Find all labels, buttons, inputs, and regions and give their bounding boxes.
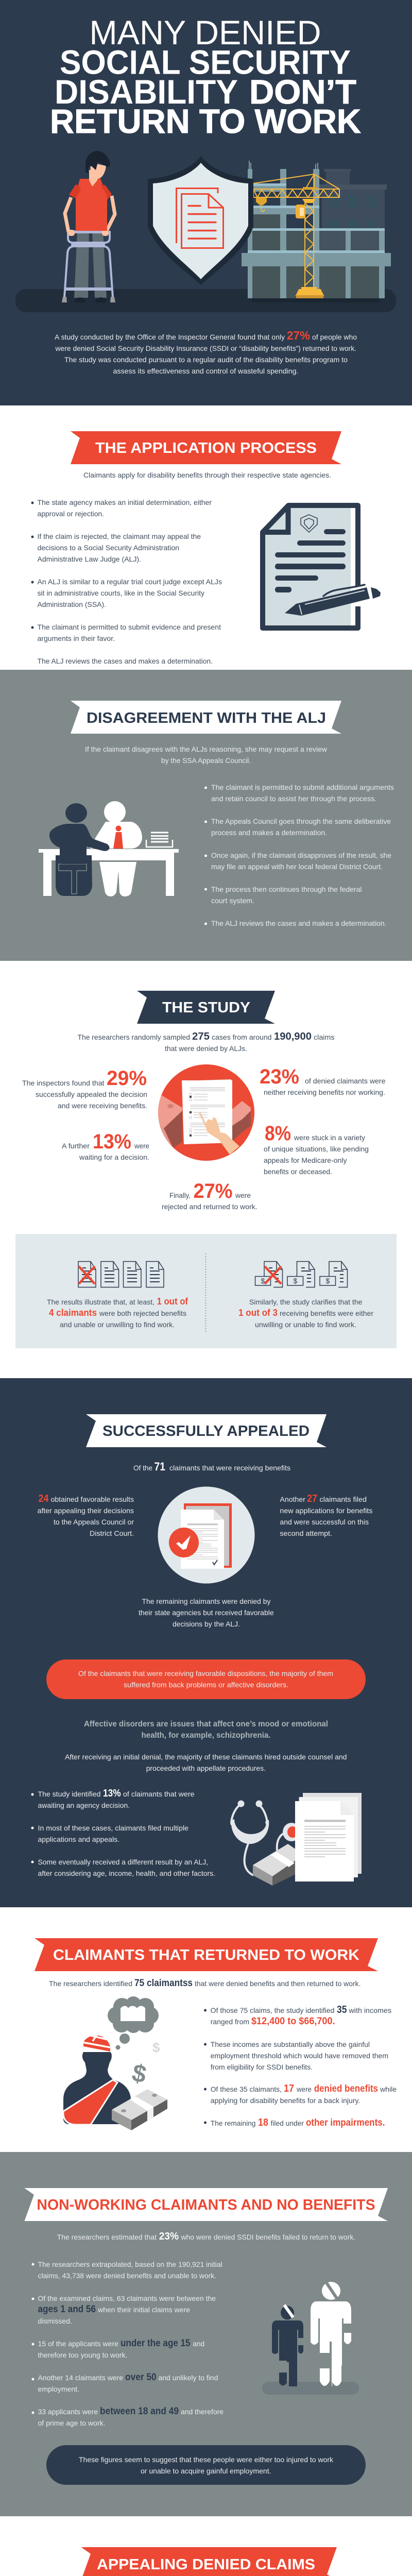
text: outside counsel: After receiving an initial denial, the majority of these claimants hired outside counsel and xyxy=(65,1753,347,1761)
dark figure xyxy=(272,2305,303,2386)
text: affective disorders definition: Affective disorders are issues that affect one’s mood or emotional xyxy=(84,1720,328,1728)
returned list: 18 xyxy=(258,2117,268,2128)
shield with document icon xyxy=(148,156,253,285)
tower crane xyxy=(253,174,339,298)
stat: 8%: appeals for Medicare-only xyxy=(264,1156,347,1164)
title xyxy=(50,13,361,140)
stat: 23%: 23% xyxy=(260,1065,299,1088)
text: 27 new applications: claimants filed xyxy=(319,1495,367,1503)
application list: The state agency makes an initial determination, either xyxy=(37,498,212,506)
study intro: that were denied by ALJs. xyxy=(165,1044,247,1053)
illustration: stethoscope, money and papers xyxy=(231,1793,362,1886)
text: 24 appeals: after appealing their decisions xyxy=(37,1506,134,1515)
intro paragraph: were denied Social Security Disability Insurance (SSDI or “disability benefits”) returned to work. xyxy=(55,344,356,352)
section background: successfully appealed xyxy=(0,1378,412,1907)
intro paragraph: of people who xyxy=(312,333,357,341)
application list: arguments in their favor. xyxy=(37,634,115,642)
section background: non-working xyxy=(0,2152,412,2516)
appealed list: In most of these cases, claimants filed multiple xyxy=(38,1824,188,1832)
returned list: while xyxy=(380,2085,397,2093)
disagreement intro: by the SSA Appeals Council. xyxy=(161,756,251,765)
disagreement list: process and makes a determination. xyxy=(211,828,327,837)
appealed intro: claimants that were receiving benefits xyxy=(169,1464,290,1472)
text: remaining claimants: The remaining claimants were denied by xyxy=(142,1597,271,1605)
text: 1 out of 4: 1 out of xyxy=(157,1296,188,1307)
text: 24 appeals: to the Appeals Council or xyxy=(54,1518,134,1526)
banner: the application process xyxy=(71,431,341,464)
intro paragraph: The study was conducted pursuant to a regular audit of the disability benefits program to xyxy=(64,355,348,364)
study intro: cases from around xyxy=(212,1033,272,1041)
appealed list: The study identified xyxy=(38,1790,101,1798)
returned list: other impairments. xyxy=(306,2117,385,2128)
stat: 29%: and were receiving benefits. xyxy=(58,1101,147,1110)
returned list: filed under xyxy=(271,2119,304,2127)
title: DON’T xyxy=(249,73,356,111)
returned intro: 75 claimantss xyxy=(134,1978,193,1989)
application list: The claimant is permitted to submit evidence and present xyxy=(37,623,221,631)
non-working list: dismissed. xyxy=(38,2317,72,2325)
paper stack xyxy=(295,1793,362,1882)
icon: three documents with dollar bills, one crossed out: $ xyxy=(261,1277,265,1285)
returned intro: that were denied benefits and then returned to work. xyxy=(195,1979,360,1988)
study intro: claims xyxy=(314,1033,335,1041)
stat: 23% xyxy=(260,1065,386,1096)
application list: Administrative Law Judge (ALJ). xyxy=(37,555,141,563)
dollar signs: $ xyxy=(152,2040,160,2055)
banner: successfully appealed: SUCCESSFULLY APPEALED xyxy=(102,1423,310,1439)
stethoscope xyxy=(231,1800,300,1875)
returned list: These incomes are substantially above the gainful xyxy=(211,2040,370,2048)
text: 1 out of 3: unwilling or unable to find work. xyxy=(255,1320,356,1329)
study intro: 275 xyxy=(192,1031,210,1042)
callout: back problems or affective disorders: suffered from back problems or affective disorders. xyxy=(124,1681,288,1689)
appealed list: Some eventually received a different result by an ALJ, xyxy=(38,1858,208,1866)
text: 27 new applications: 27 xyxy=(307,1493,317,1504)
application list: decisions to a Social Security Administration xyxy=(37,544,179,552)
sling xyxy=(63,2080,117,2125)
callout: back problems or affective disorders: Of the claimants that were receiving favorable dispositions, the majority of them xyxy=(78,1669,333,1677)
stat: 13%: 13% xyxy=(93,1130,131,1153)
disagreement list xyxy=(204,783,394,927)
intro paragraph: 27% xyxy=(287,329,310,342)
stat: 29%: The inspectors found that xyxy=(22,1079,105,1087)
stat: 13%: were xyxy=(134,1142,149,1150)
banner: disagreement with the alj xyxy=(71,701,341,734)
returned list: employment threshold which would have removed them xyxy=(211,2052,388,2060)
non-working list xyxy=(32,2260,224,2427)
stat: 29% xyxy=(22,1067,147,1110)
intro paragraph xyxy=(55,329,357,375)
stat: 27%: Finally, xyxy=(169,1191,191,1199)
banner: claimants that returned to work xyxy=(35,1938,378,1971)
stat: 8%: 8% xyxy=(265,1122,291,1145)
non-working list: 15 of the applicants were xyxy=(38,2340,118,2348)
non-working intro: The researchers estimated that xyxy=(57,2233,157,2241)
banner: the application process: THE APPLICATION PROCESS xyxy=(95,440,317,456)
money stack xyxy=(253,1844,304,1886)
returned list: with incomes xyxy=(348,2006,391,2014)
banner: the study xyxy=(137,991,275,1024)
non-working list: and xyxy=(193,2340,204,2348)
callout: back problems or affective disorders xyxy=(46,1659,366,1699)
returned intro xyxy=(49,1978,360,1989)
returned list: Of those 75 claims, the study identified xyxy=(211,2006,335,2014)
banner: the study: THE STUDY xyxy=(162,999,250,1016)
text: 27 new applications: Another xyxy=(280,1495,305,1503)
callout: too injured or unable xyxy=(46,2445,366,2485)
stat: 8%: were stuck in a variety xyxy=(294,1133,365,1142)
icon: three documents with dollar bills, one crossed out xyxy=(255,1261,347,1287)
text: 27 new applications: new applications for benefits xyxy=(280,1506,372,1515)
section background: header xyxy=(0,0,412,405)
non-working intro: who were denied SSDI benefits failed to return to work. xyxy=(181,2233,355,2241)
banner: claimants that returned to work: CLAIMANTS THAT RETURNED TO WORK xyxy=(53,1947,359,1963)
illustration: approved document circle xyxy=(158,1487,254,1584)
hero illustration xyxy=(15,151,396,312)
appealed list: of claimants that were xyxy=(123,1790,195,1798)
banner: disagreement with the alj: DISAGREEMENT WITH THE ALJ xyxy=(87,710,326,726)
returned list: $12,400 to $66,700. xyxy=(251,2016,335,2027)
stat: 8% xyxy=(264,1122,369,1176)
banner: non-working claimants and no benefits xyxy=(24,2188,388,2221)
application list: If the claim is rejected, the claimant may appeal the xyxy=(37,532,201,540)
disagreement list: The Appeals Council goes through the same deliberative xyxy=(211,817,391,825)
text: 24 appeals: 24 xyxy=(38,1493,49,1504)
returned list: were xyxy=(296,2085,312,2093)
disagreement intro xyxy=(85,745,328,765)
appealed list: 13% xyxy=(103,1788,121,1799)
non-working list: claims, 43,738 were denied benefits and unable to work. xyxy=(38,2272,216,2280)
disagreement list: The claimant is permitted to submit additional arguments xyxy=(211,783,394,791)
stat: 13%: A further xyxy=(62,1142,90,1150)
icon: signed document with pen xyxy=(263,505,381,628)
ground shadow xyxy=(15,289,396,312)
construction building xyxy=(242,161,391,302)
returned list: Of these 35 claimants, xyxy=(211,2085,282,2093)
background building xyxy=(319,169,387,228)
text: affective disorders definition xyxy=(84,1720,328,1740)
non-working list: under the age 15 xyxy=(121,2338,191,2349)
intro paragraph: A study conducted by the Office of the Inspector General found that only xyxy=(55,333,285,341)
disagreement list: Once again, if the claimant disapproves of the result, she xyxy=(211,851,391,859)
stat: 8%: of unique situations, like pending xyxy=(264,1145,369,1153)
appealed list: awaiting an agency decision. xyxy=(38,1801,130,1809)
non-working list: and therefore xyxy=(181,2408,224,2416)
text: 27 new applications xyxy=(280,1493,372,1537)
banner: appealing denied claims: APPEALING DENIED CLAIMS xyxy=(97,2556,315,2573)
text: 1 out of 3: receiving benefits were either xyxy=(280,1309,373,1317)
icon: four documents, one crossed out xyxy=(78,1261,164,1287)
title: DISABILITY xyxy=(55,73,238,111)
text: 24 appeals: obtained favorable results xyxy=(50,1495,134,1503)
text: remaining claimants xyxy=(139,1597,274,1628)
application list: approval or rejection. xyxy=(37,510,104,518)
returned list: from eligibility for SSDI benefits. xyxy=(211,2063,313,2071)
appealed list xyxy=(31,1788,215,1877)
non-working list: Of the examined claims, 63 claimants were between the xyxy=(38,2294,216,2302)
stat: 27%: rejected and returned to work. xyxy=(162,1202,258,1211)
banner: appealing denied claims xyxy=(81,2547,337,2576)
returned list: ranged from xyxy=(211,2018,249,2026)
text: 1 out of 4: 4 claimants xyxy=(49,1308,97,1318)
stat: 23%: neither receiving benefits nor working. xyxy=(264,1088,385,1096)
application list: An ALJ is similar to a regular trial court judge except ALJs xyxy=(37,578,222,586)
icon: three documents with dollar bills, one crossed out: $ xyxy=(325,1277,330,1285)
illustration: injured child and adult figures xyxy=(262,2281,359,2395)
text: 1 out of 3: 1 out of 3 xyxy=(238,1308,278,1318)
non-working list: between 18 and 49 xyxy=(100,2406,179,2417)
non-working list: 33 applicants were xyxy=(38,2408,98,2416)
banner: non-working claimants and no benefits: NON-WORKING CLAIMANTS AND NO BENEFITS xyxy=(37,2197,375,2213)
text: 1 out of 4: and unable or unwilling to find work. xyxy=(60,1320,175,1329)
text: 1 out of 3: Similarly, the study clarifies that the xyxy=(249,1298,363,1306)
appealed list: applications and appeals. xyxy=(38,1835,119,1843)
intro paragraph: assess its effectiveness and control of wasteful spending. xyxy=(113,367,299,375)
text: 1 out of 4 xyxy=(47,1296,188,1329)
non-working list: therefore too young to work. xyxy=(38,2351,127,2359)
returned list: The remaining xyxy=(211,2119,255,2127)
text: affective disorders definition: health, for example, schizophrenia. xyxy=(141,1731,271,1740)
returned list: 17 xyxy=(284,2083,294,2094)
dollar signs xyxy=(130,2040,160,2089)
text: 1 out of 3 xyxy=(238,1298,373,1329)
stat: 29%: 29% xyxy=(107,1067,147,1090)
section background: disagreement xyxy=(0,670,412,961)
money stacks xyxy=(158,1095,251,1148)
disagreement list: and retain council to assist her through the process. xyxy=(211,794,376,803)
application list xyxy=(31,498,222,665)
text: 24 appeals: District Court. xyxy=(90,1529,134,1537)
appealed list: after considering age, income, health, and other factors. xyxy=(38,1869,215,1877)
text: 1 out of 4: were both rejected benefits xyxy=(99,1309,186,1317)
non-working list: and unlikely to find xyxy=(159,2374,218,2382)
callout: too injured or unable: These figures seem to suggest that these people were either too injured to work xyxy=(79,2455,334,2464)
icon: claimant meeting at a desk xyxy=(39,801,179,896)
disagreement list: court system. xyxy=(211,896,254,905)
stat: 13%: waiting for a decision. xyxy=(79,1153,149,1161)
non-working list: when their initial claims were xyxy=(97,2306,190,2314)
returned list: applying for disability benefits for a back injury. xyxy=(211,2096,360,2105)
text: 27 new applications: and were successful on this xyxy=(280,1518,369,1526)
text: 1 out of 4: The results illustrate that, at least, xyxy=(47,1298,154,1306)
disagreement list: may file an appeal with her local federal District Court. xyxy=(211,862,383,871)
non-working list: of prime age to work. xyxy=(38,2419,106,2427)
returned list: 35 xyxy=(337,2004,347,2015)
text: 24 appeals xyxy=(37,1493,134,1537)
head and bandage xyxy=(63,2033,131,2124)
appealed intro: Of the xyxy=(133,1464,152,1472)
non-working list: Another 14 claimants were xyxy=(38,2374,123,2382)
application list: sit in administrative courts, like in the Social Security xyxy=(37,589,204,597)
application list: Administration (SSA). xyxy=(37,600,106,608)
non-working list: ages 1 and 56 xyxy=(38,2304,96,2315)
title: RETURN TO WORK xyxy=(50,102,361,140)
appealed intro xyxy=(133,1460,290,1473)
stat: 13% xyxy=(62,1130,149,1161)
stat: 8%: benefits or deceased. xyxy=(264,1167,332,1176)
study illustration: checklist circle xyxy=(152,1064,254,1161)
application list: The ALJ reviews the cases and makes a determination. xyxy=(37,657,213,665)
text: outside counsel: proceeded with appellate procedures. xyxy=(146,1764,266,1772)
returned list xyxy=(204,2004,397,2128)
icon: three documents with dollar bills, one crossed out: $ xyxy=(294,1277,298,1285)
money stack xyxy=(112,2089,167,2130)
stat: 29%: successfully appealed the decision xyxy=(36,1090,147,1098)
stat: 23%: of denied claimants were xyxy=(305,1077,386,1085)
application intro: Claimants apply for disability benefits through their respective state agencies. xyxy=(83,471,331,479)
returned list: denied benefits xyxy=(314,2083,378,2094)
text: outside counsel xyxy=(65,1753,347,1772)
non-working list: over 50 xyxy=(125,2372,157,2383)
thought cloud xyxy=(108,1996,159,2049)
stat: 27% xyxy=(162,1180,258,1211)
title: MANY DENIED xyxy=(90,13,321,52)
dollar signs: $ xyxy=(130,2059,149,2089)
non-working intro: 23% xyxy=(159,2231,179,2242)
title: SOCIAL SECURITY xyxy=(60,43,351,81)
text: 27 new applications: second attempt. xyxy=(280,1529,332,1537)
study intro xyxy=(77,1031,335,1053)
disagreement intro: If the claimant disagrees with the ALJs reasoning, she may request a review xyxy=(85,745,328,753)
returned intro: The researchers identified xyxy=(49,1979,132,1988)
banner: successfully appealed xyxy=(86,1414,327,1447)
non-working intro xyxy=(57,2231,355,2242)
white figure xyxy=(311,2281,351,2386)
study intro: 190,900 xyxy=(274,1031,312,1042)
stat: 27%: 27% xyxy=(194,1180,233,1202)
non-working list: employment. xyxy=(38,2385,79,2393)
study intro: The researchers randomly sampled xyxy=(77,1033,190,1041)
illustration: injured worker thinking of work and money xyxy=(63,1996,167,2130)
panel: study results xyxy=(15,1234,397,1348)
non-working list: The researchers extrapolated, based on the 190,921 initial xyxy=(38,2260,222,2268)
person with walker xyxy=(62,151,115,302)
text: remaining claimants: their state agencies but received favorable xyxy=(139,1608,274,1617)
text: remaining claimants: decisions by the ALJ. xyxy=(173,1620,240,1628)
appealed intro: 71 xyxy=(154,1460,165,1473)
disagreement list: The ALJ reviews the cases and makes a determination. xyxy=(211,919,386,927)
stat: 27%: were xyxy=(235,1191,251,1199)
disagreement list: The process then continues through the federal xyxy=(211,885,362,893)
callout: too injured or unable: or unable to acquire gainful employment. xyxy=(141,2467,271,2475)
